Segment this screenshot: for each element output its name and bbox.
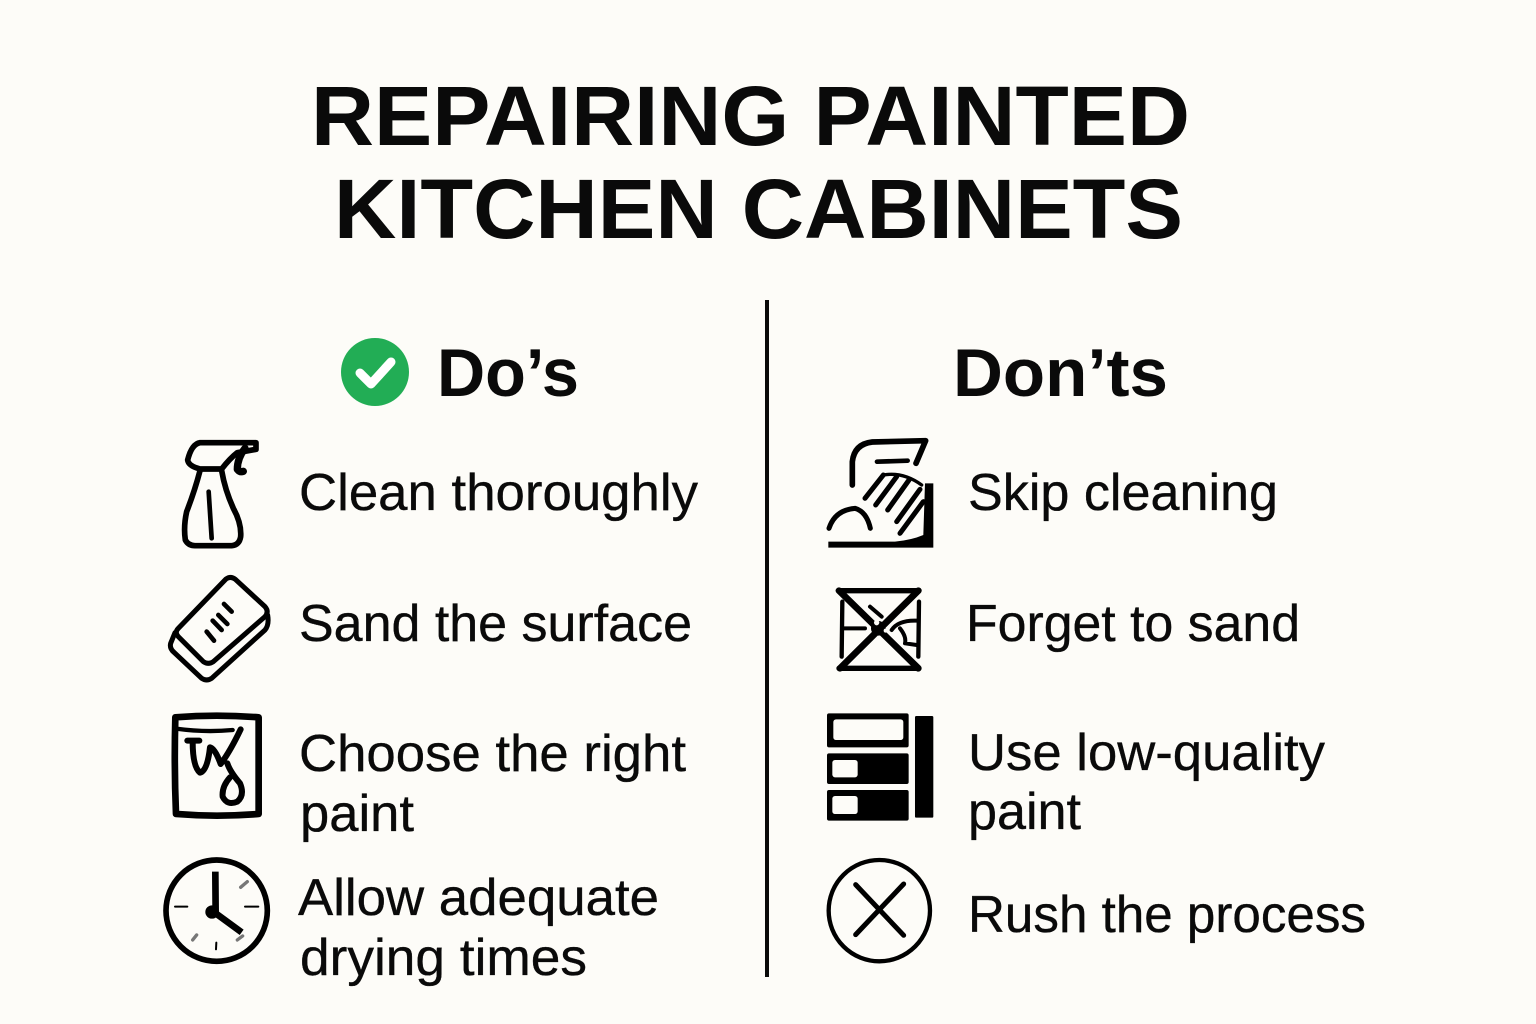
icon: paint can [175, 716, 259, 816]
text: choose the right paint: paint [300, 785, 415, 843]
icon: clock [166, 860, 267, 961]
text: use low-quality paint: Use low-quality [968, 724, 1325, 782]
text: sand the surface: Sand the surface [299, 595, 692, 653]
title [311, 69, 1190, 256]
icon: spray bottle [185, 443, 256, 546]
center divider [765, 300, 769, 977]
text: choose the right paint: Choose the right [299, 725, 687, 783]
icon: sanding block [170, 577, 268, 680]
title: KITCHEN CABINETS [334, 162, 1183, 256]
heading: don'ts: Don’ts [953, 335, 1168, 411]
heading: do's: Do’s [437, 335, 579, 411]
text: use low-quality paint [968, 724, 1325, 841]
text: clean thoroughly: Clean thoroughly [299, 464, 698, 522]
text: choose the right paint [299, 725, 687, 843]
icon: hand wiping [828, 441, 933, 548]
text: allow adequate drying times [298, 869, 659, 987]
icon: paint swatch bars [827, 713, 933, 821]
text: forget to sand: Forget to sand [966, 595, 1300, 653]
panel: don'ts [827, 335, 1366, 961]
title: REPAIRING PAINTED [311, 69, 1190, 163]
text: rush the process: Rush the process [968, 886, 1366, 944]
text: allow adequate drying times: Allow adequate [298, 869, 659, 927]
icon: green check [341, 338, 409, 406]
panel: do's [166, 335, 698, 987]
text: use low-quality paint: paint [968, 783, 1082, 841]
text: allow adequate drying times: drying times [300, 929, 587, 987]
text: skip cleaning: Skip cleaning [968, 464, 1278, 522]
icon: crossed-out sanding [838, 591, 919, 668]
icon: x in circle [829, 860, 930, 961]
